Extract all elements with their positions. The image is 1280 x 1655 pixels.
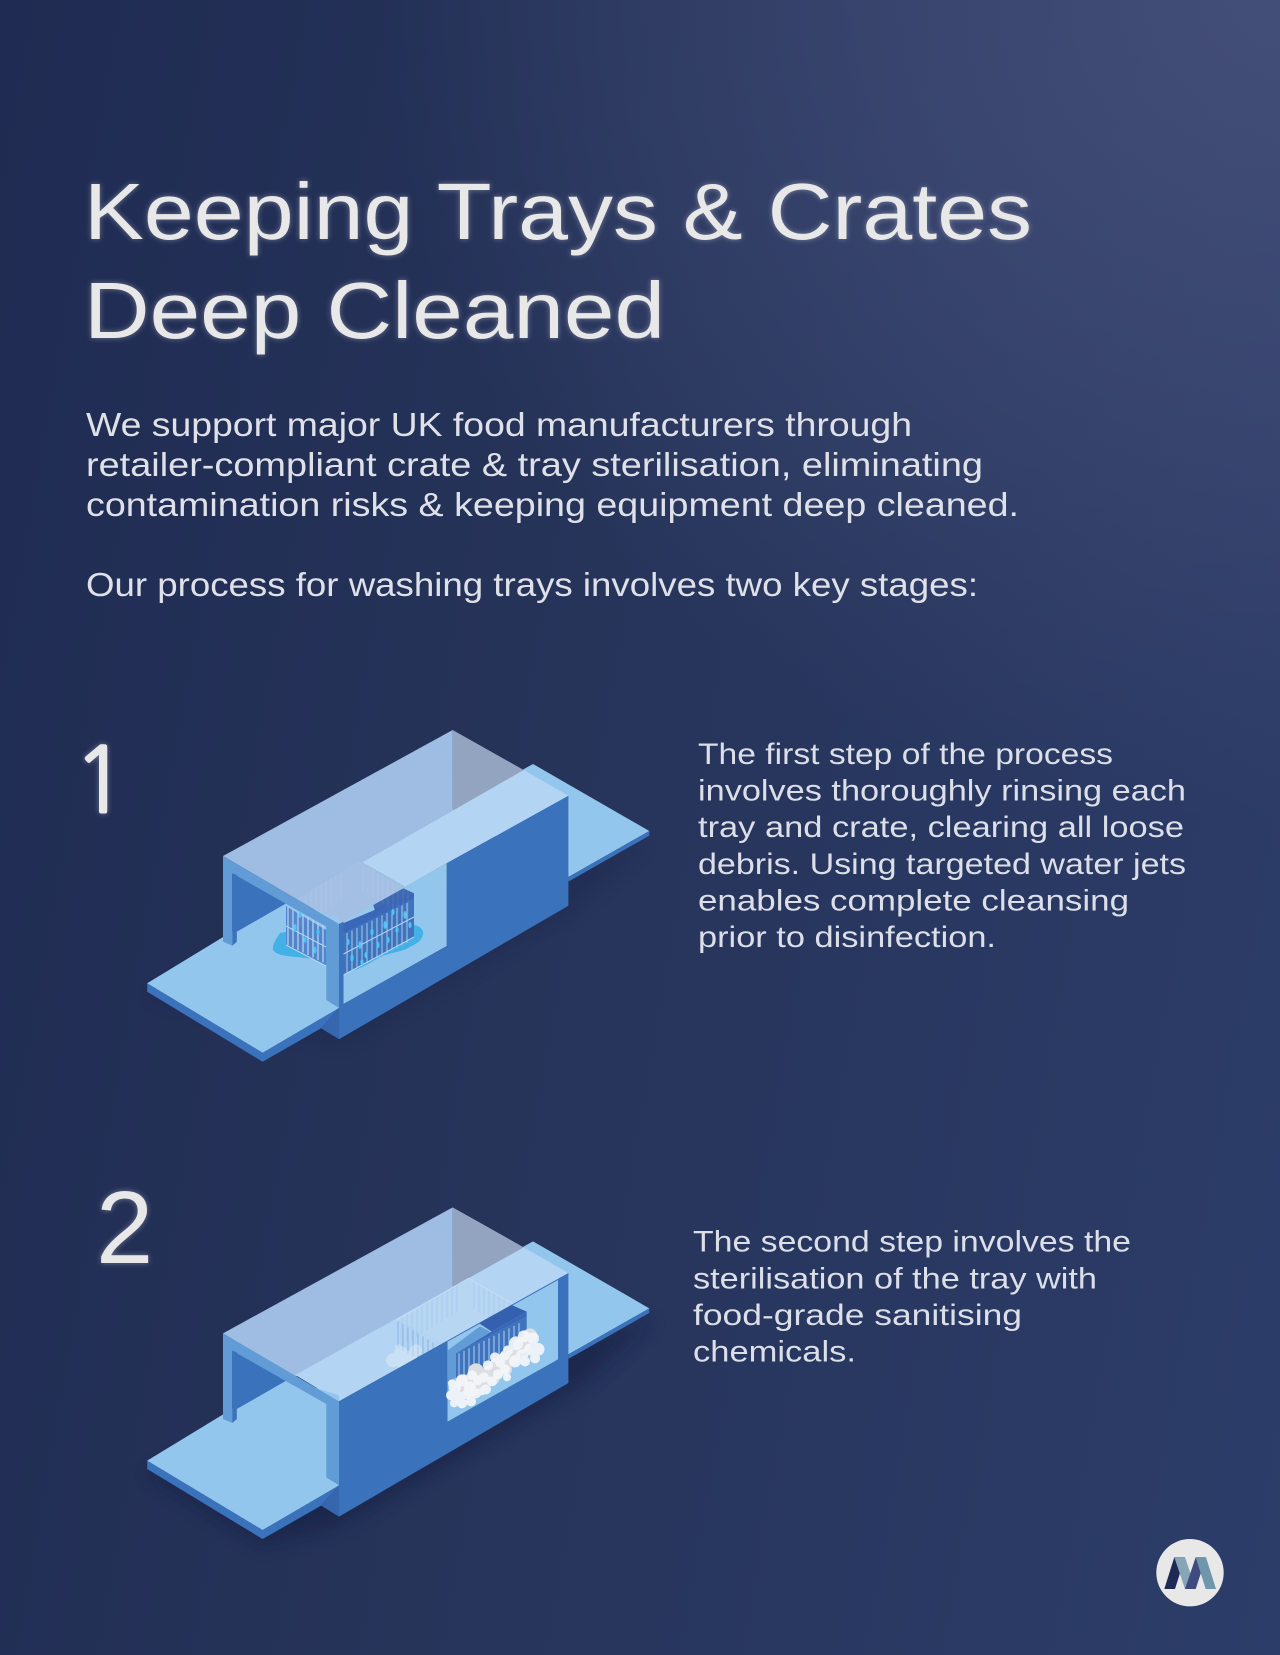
foam bubbles	[446, 1328, 544, 1408]
side window	[339, 863, 447, 1008]
infeed platform	[147, 900, 339, 1062]
shadow	[147, 842, 649, 1045]
logo	[1156, 1539, 1224, 1606]
step 1 text: The first step of the process	[698, 738, 1113, 771]
step 2 text: chemicals.	[693, 1336, 856, 1369]
step number 2: 2	[96, 1170, 153, 1285]
step number 1: 1	[73, 735, 128, 825]
diagram: step 2 sterilisation tunnel	[147, 1207, 655, 1545]
frame inner edges	[232, 873, 344, 1008]
title: Deep Cleaned	[84, 266, 665, 355]
faint foam behind wall	[386, 1344, 422, 1368]
faint crate behind wall	[397, 1278, 527, 1368]
diagram: step 1 rinsing tunnel	[147, 730, 649, 1062]
tunnel roof	[223, 730, 453, 924]
title	[84, 167, 1032, 355]
step 2 text	[693, 1226, 1131, 1369]
crate seen through roof	[286, 862, 414, 931]
step 1 text: debris. Using targeted water jets	[698, 848, 1186, 881]
tunnel back wall	[453, 1207, 524, 1289]
step 1 text	[698, 738, 1186, 954]
tunnel back wall	[453, 730, 524, 812]
exit platform	[450, 1241, 649, 1359]
side wall	[339, 1273, 568, 1517]
glass roof band	[295, 1247, 568, 1401]
shadow	[147, 1319, 655, 1545]
side wall	[339, 796, 568, 1039]
tunnel roof	[223, 1207, 453, 1377]
crate inside window	[448, 1305, 527, 1391]
crate	[286, 888, 414, 975]
side window	[448, 1280, 558, 1422]
glass roof band	[362, 770, 568, 887]
intro paragraph: retailer-compliant crate & tray sterilisation, eliminating	[86, 446, 983, 483]
tunnel front frame	[223, 1333, 339, 1485]
tunnel inner wall	[232, 870, 292, 932]
infeed platform	[147, 1377, 339, 1539]
tunnel front frame	[223, 856, 339, 1008]
title: Keeping Trays & Crates	[84, 167, 1032, 256]
intro paragraph: Our process for washing trays involves two key stages:	[86, 566, 978, 603]
crate right face	[339, 888, 414, 975]
intro paragraph: We support major UK food manufacturers through	[86, 406, 912, 443]
step 1 text: involves thoroughly rinsing each	[698, 775, 1186, 808]
water puddle	[273, 925, 423, 972]
crate left face	[286, 906, 326, 966]
step 1 text: enables complete cleansing	[698, 885, 1129, 918]
step 2 text: food-grade sanitising	[693, 1299, 1022, 1332]
water drops	[293, 909, 412, 965]
step 1 text: tray and crate, clearing all loose	[698, 811, 1184, 844]
intro paragraph: contamination risks & keeping equipment deep cleaned.	[86, 486, 1019, 523]
step 2 text: sterilisation of the tray with	[693, 1262, 1097, 1295]
step 2 text: The second step involves the	[693, 1226, 1131, 1259]
intro paragraph	[86, 406, 1019, 603]
exit platform	[450, 764, 649, 882]
frame inner edge	[232, 1351, 237, 1423]
step 1 text: prior to disinfection.	[698, 921, 996, 954]
tunnel inner wall	[232, 1347, 292, 1409]
